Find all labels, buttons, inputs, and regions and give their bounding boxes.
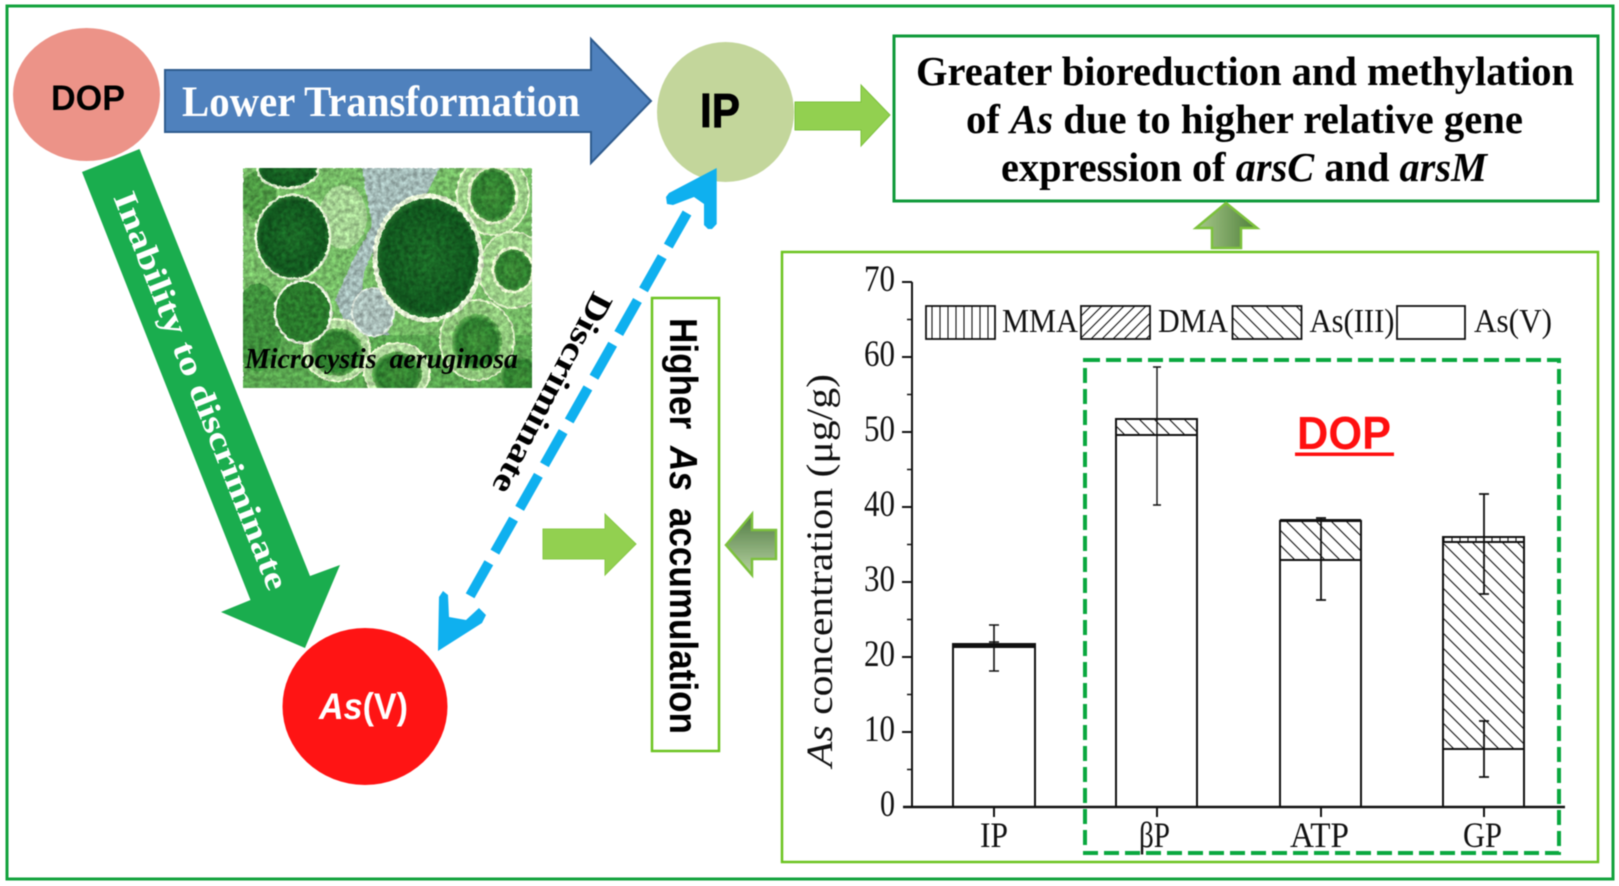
legend [926, 303, 1552, 340]
node: As(V) [282, 628, 448, 785]
x axis labels: ATP [1290, 815, 1349, 855]
arrow: lower transformation: Lower Transformation [182, 79, 580, 126]
arrow: IP to conclusion [795, 85, 890, 146]
conclusion box [894, 36, 1598, 201]
node: DOP: DOP [51, 79, 125, 118]
y axis tick labels: 70 [864, 259, 895, 300]
arrow: lower transformation [165, 39, 651, 163]
y axis tick labels: 30 [864, 559, 895, 600]
label: DOP: DOP [1297, 407, 1391, 459]
y axis title: As concentration (μg/g) [800, 374, 841, 770]
bars: ATP [1280, 518, 1361, 807]
dashed DOP group box [1085, 360, 1559, 853]
legend: As(V) [1474, 303, 1552, 340]
legend: MMA [1002, 303, 1078, 340]
conclusion box: expression of arsC and arsM [1001, 144, 1489, 190]
bars: beta P [1116, 367, 1197, 807]
node: As(V): As(V) [318, 686, 408, 727]
node: DOP [13, 28, 160, 161]
x axis labels: βP [1139, 815, 1170, 855]
y axis tick labels [864, 259, 895, 825]
y axis tick labels: 50 [864, 409, 895, 450]
y axis tick labels: 40 [864, 484, 895, 525]
arrow: from chart to accumulation [726, 514, 776, 575]
x axis labels: GP [1463, 815, 1502, 855]
conclusion box: Greater bioreduction and methylation [916, 48, 1574, 94]
node: IP [657, 42, 794, 182]
x axis labels: IP [980, 815, 1008, 855]
y axis tick labels: 60 [864, 334, 895, 375]
node: IP: IP [700, 85, 740, 138]
x axis labels [980, 815, 1502, 855]
y axis tick labels: 10 [864, 709, 895, 750]
photo: Microcystis aeruginosa [242, 167, 533, 389]
axes [902, 282, 1565, 817]
y axis tick labels: 0 [880, 784, 895, 825]
box: higher As accumulation [652, 298, 719, 751]
arrow: discriminate double-headed dashed [438, 168, 717, 651]
arrow: to accumulation from left [543, 514, 636, 575]
label: inability to discriminate: Inability to discriminate [106, 187, 295, 595]
arrow: inability to discriminate [82, 149, 340, 648]
bars: IP [953, 625, 1035, 807]
photo: Microcystis aeruginosa: Microcystis aeruginosa [244, 344, 518, 375]
panel: bar chart [782, 252, 1598, 862]
arrow: chart to conclusion [1196, 203, 1257, 248]
legend: DMA [1158, 303, 1228, 340]
box: higher As accumulation: Higher As accumulation [661, 318, 704, 734]
bars: GP [1443, 494, 1524, 807]
y axis tick labels: 20 [864, 634, 895, 675]
legend: As(III) [1310, 303, 1394, 340]
conclusion box: of As due to higher relative gene [966, 96, 1523, 142]
label: discriminate: Discriminate [484, 286, 619, 500]
